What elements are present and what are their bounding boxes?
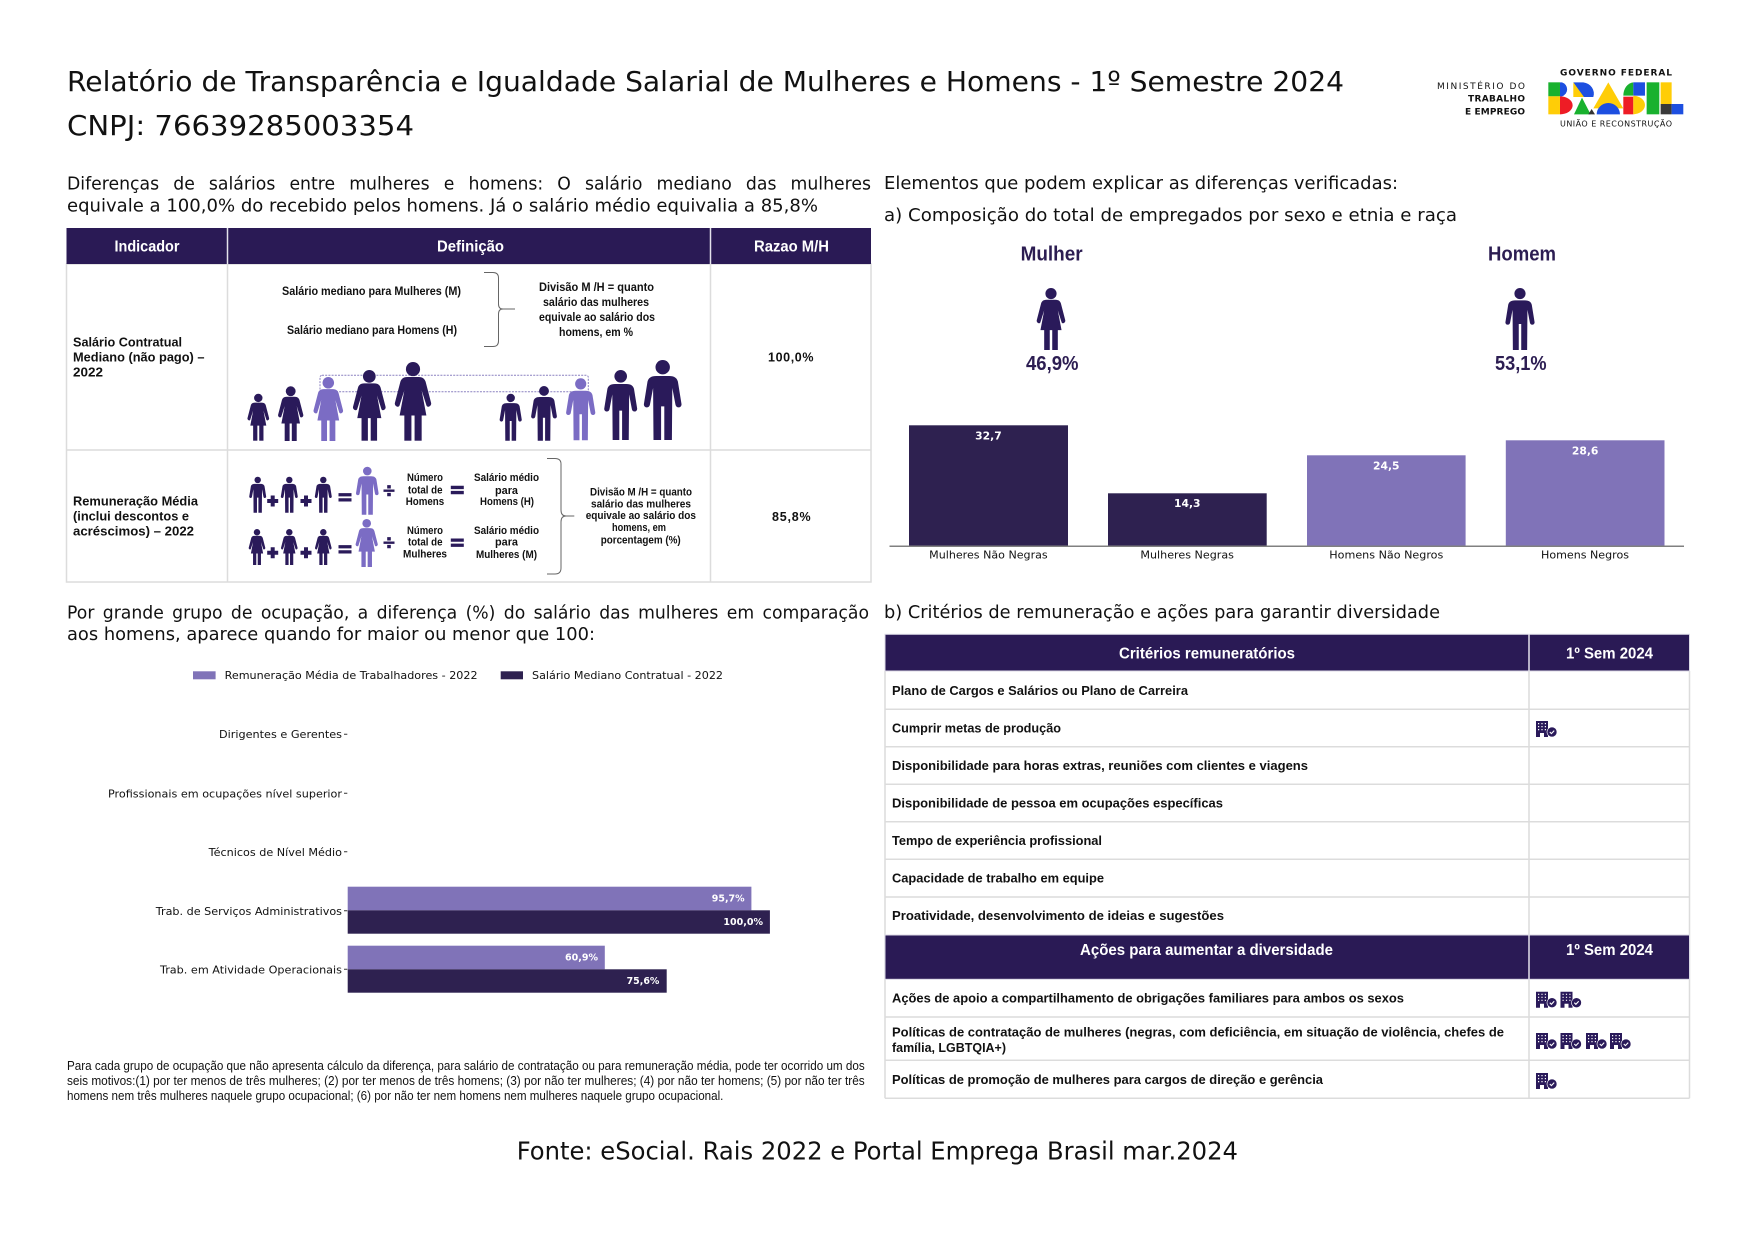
table header — [66, 228, 871, 264]
equation: men average: Homens (H) — [480, 496, 534, 508]
median salary labels: Salário mediano para Mulheres (M) — [282, 284, 461, 298]
logo: ministry and Governo Federal Brasil: TRABALHO — [1468, 95, 1525, 105]
criteria rows: Disponibilidade para horas extras, reuniões com clientes e viagens — [892, 759, 1308, 773]
brace: average — [547, 458, 574, 574]
table header: Definição — [437, 239, 504, 256]
header: actions: 1º Sem 2024 — [1566, 942, 1653, 959]
actions rows — [892, 992, 1504, 1087]
bar: Mulheres Negras — [1108, 493, 1267, 562]
bar: Mulheres Não Negras: Mulheres Não Negras — [929, 548, 1048, 562]
actions rows: família, LGBTQIA+) — [892, 1041, 1006, 1055]
stat: women share: Mulher — [1021, 244, 1083, 266]
bars: operational activities: 75,6% — [627, 976, 660, 987]
heading: composition: a) Composição do total de empregados por sexo e etnia e raça — [884, 205, 1457, 226]
legend: Salário Mediano Contratual - 2022 — [532, 669, 723, 682]
heading: occupation groups: aos homens, aparece quando for maior ou menor que 100: — [67, 624, 595, 645]
icons: men ordered by salary — [500, 360, 682, 441]
footnote: seis motivos:(1) por ter menos de três mulheres; (2) por ter menos de três homens; (3) por não ter mulheres; (4) por não ter homens; (5) por não ter três — [67, 1074, 865, 1088]
heading: occupation groups — [67, 602, 869, 645]
actions rows: Políticas de promoção de mulheres para cargos de direção e gerência — [892, 1073, 1324, 1087]
header: actions — [885, 935, 1690, 979]
criteria rows: Proatividade, desenvolvimento de ideias e sugestões — [892, 909, 1224, 923]
table header: Razao M/H — [754, 239, 829, 256]
average division explanation: Divisão M /H = quanto — [590, 487, 692, 499]
equation: women average: para — [495, 537, 519, 549]
category labels: Profissionais em ocupações nível superior — [108, 787, 342, 800]
row label: average pay: acréscimos) – 2022 — [73, 524, 194, 539]
bar: Homens Negros — [1506, 440, 1664, 562]
table header: Indicador — [114, 239, 180, 256]
median division explanation — [539, 280, 655, 339]
bar: Homens Não Negros: Homens Não Negros — [1329, 548, 1444, 562]
icons: company markers, actions — [1536, 992, 1631, 1089]
bar chart: workforce composition — [890, 425, 1684, 562]
logo: ministry and Governo Federal Brasil: GOVERNO FEDERAL — [1560, 69, 1672, 79]
header: actions: Ações para aumentar a diversidade — [1080, 942, 1333, 959]
median division explanation: Divisão M /H = quanto — [539, 280, 654, 294]
criteria rows — [892, 684, 1308, 923]
footnote: homens nem três mulheres naquele grupo ocupacional; (6) por não ter nem homens nem mulheres naquele grupo ocupacional. — [67, 1089, 723, 1103]
stat: women share — [1021, 244, 1083, 375]
bar: Homens Negros: Homens Negros — [1541, 548, 1629, 562]
bars: administrative services — [348, 887, 770, 934]
median division explanation: salário das mulheres — [543, 295, 649, 309]
panel: criteria and actions table — [885, 634, 1690, 1098]
stat: men share — [1488, 244, 1556, 375]
category labels: Técnicos de Nível Médio — [208, 846, 342, 859]
heading: occupation groups: Por grande grupo de ocupação, a diferença (%) do salário das mulheres em comparação — [67, 602, 869, 623]
median division explanation: equivale ao salário dos — [539, 310, 655, 324]
intro text: salary differences: equivale a 100,0% do recebido pelos homens. Já o salário médio equivalia a 85,8% — [67, 196, 818, 217]
header: criteria: 1º Sem 2024 — [1566, 645, 1653, 662]
criteria rows: Disponibilidade de pessoa em ocupações específicas — [892, 796, 1223, 810]
row label: average pay: (inclui descontos e — [73, 509, 189, 524]
equation: women average: Mulheres (M) — [476, 549, 537, 561]
bar: Mulheres Negras: Mulheres Negras — [1140, 548, 1234, 562]
bars: administrative services: 100,0% — [723, 917, 763, 928]
bars: operational activities — [348, 946, 667, 993]
bar: Mulheres Negras: 14,3 — [1174, 498, 1200, 510]
title: Relatório de Transparência e Igualdade Salarial de Mulheres e Homens - 1º Semestre 2024 — [67, 65, 1344, 98]
category labels: Trab. em Atividade Operacionais — [159, 964, 342, 977]
stat: men share: Homem — [1488, 244, 1556, 266]
equation: men average: para — [495, 485, 519, 497]
logo: ministry and Governo Federal Brasil — [1437, 69, 1683, 129]
equation: women average: Número — [407, 525, 443, 537]
header: criteria — [885, 634, 1690, 671]
legend — [193, 669, 723, 682]
brace: median — [484, 272, 515, 346]
bar: Mulheres Não Negras: 32,7 — [975, 430, 1002, 442]
category labels: Dirigentes e Gerentes — [219, 728, 342, 741]
row label: average pay — [73, 494, 199, 539]
median salary labels — [282, 284, 461, 337]
title: CNPJ: 76639285003354 — [67, 109, 414, 142]
equation: women average — [249, 519, 539, 567]
actions rows: Políticas de contratação de mulheres (negras, com deficiência, em situação de violência, chefes de — [892, 1026, 1504, 1040]
equation: men average — [249, 467, 539, 515]
bar chart: pay ratio by occupation — [108, 728, 770, 993]
criteria rows: Plano de Cargos e Salários ou Plano de Carreira — [892, 684, 1189, 698]
bars: administrative services: 95,7% — [712, 894, 745, 905]
panel: indicator table — [66, 228, 871, 582]
bar: Homens Não Negros — [1307, 455, 1466, 562]
category labels — [108, 728, 347, 977]
row label: average pay: Remuneração Média — [73, 494, 199, 509]
average division explanation: homens, em — [612, 522, 666, 534]
source note: Fonte: eSocial. Rais 2022 e Portal Emprega Brasil mar.2024 — [517, 1136, 1238, 1165]
average division explanation: salário das mulheres — [591, 499, 691, 511]
logo: ministry and Governo Federal Brasil: UNIÃO E RECONSTRUÇÃO — [1560, 119, 1672, 129]
icons: women ordered by salary — [247, 362, 431, 441]
equation: men average: Homens — [406, 496, 444, 508]
average division explanation — [586, 487, 696, 546]
bar: Homens Não Negros: 24,5 — [1373, 460, 1400, 472]
title — [67, 65, 1344, 142]
equation: women average: Salário médio — [474, 525, 539, 537]
median division explanation: homens, em % — [559, 325, 633, 339]
median marker box — [320, 375, 588, 392]
average division explanation: equivale ao salário dos — [586, 510, 696, 522]
ratio: median: 100,0% — [768, 351, 814, 365]
icon: company marker, production goals — [1536, 721, 1557, 737]
heading: explaining elements: Elementos que podem explicar as diferenças verificadas: — [884, 173, 1398, 194]
equation: men average: total de — [408, 484, 442, 496]
row label: median salary — [73, 335, 204, 380]
equation: men average: Salário médio — [474, 472, 539, 484]
criteria rows: Tempo de experiência profissional — [892, 834, 1102, 848]
logo: ministry and Governo Federal Brasil: E EMPREGO — [1465, 107, 1525, 117]
category labels: Trab. de Serviços Administrativos — [155, 905, 342, 918]
bar: Homens Negros: 28,6 — [1572, 446, 1598, 458]
intro text: salary differences — [67, 174, 871, 217]
legend: Remuneração Média de Trabalhadores - 2022 — [225, 669, 478, 682]
equation: women average: total de — [408, 537, 442, 549]
intro text: salary differences: Diferenças de salários entre mulheres e homens: O salário mediano das mulheres — [67, 174, 871, 195]
header: criteria: Critérios remuneratórios — [1119, 645, 1295, 662]
row label: median salary: 2022 — [73, 365, 103, 380]
stat: men share: 53,1% — [1495, 353, 1547, 375]
footnote: Para cada grupo de ocupação que não apresenta cálculo da diferença, para salário de contratação ou para remuneração média, pode ter ocorrido um dos — [67, 1059, 865, 1073]
logo: ministry and Governo Federal Brasil: MINISTÉRIO DO — [1437, 80, 1525, 92]
heading: criteria: b) Critérios de remuneração e ações para garantir diversidade — [884, 602, 1440, 623]
criteria rows: Cumprir metas de produção — [892, 722, 1061, 736]
median salary labels: Salário mediano para Homens (H) — [287, 323, 457, 337]
footnote — [67, 1059, 865, 1103]
stat: women share: 46,9% — [1026, 353, 1079, 375]
actions rows: Ações de apoio a compartilhamento de obrigações familiares para ambos os sexos — [892, 992, 1404, 1006]
ratio: average: 85,8% — [772, 510, 811, 524]
average division explanation: porcentagem (%) — [601, 534, 681, 546]
equation: women average: Mulheres — [403, 549, 447, 561]
criteria rows: Capacidade de trabalho em equipe — [892, 872, 1104, 886]
bar: Mulheres Não Negras — [909, 425, 1068, 562]
row label: median salary: Salário Contratual — [73, 335, 182, 350]
equation: men average: Número — [407, 472, 443, 484]
bars: operational activities: 60,9% — [565, 952, 598, 963]
row label: median salary: Mediano (não pago) – — [73, 350, 204, 365]
